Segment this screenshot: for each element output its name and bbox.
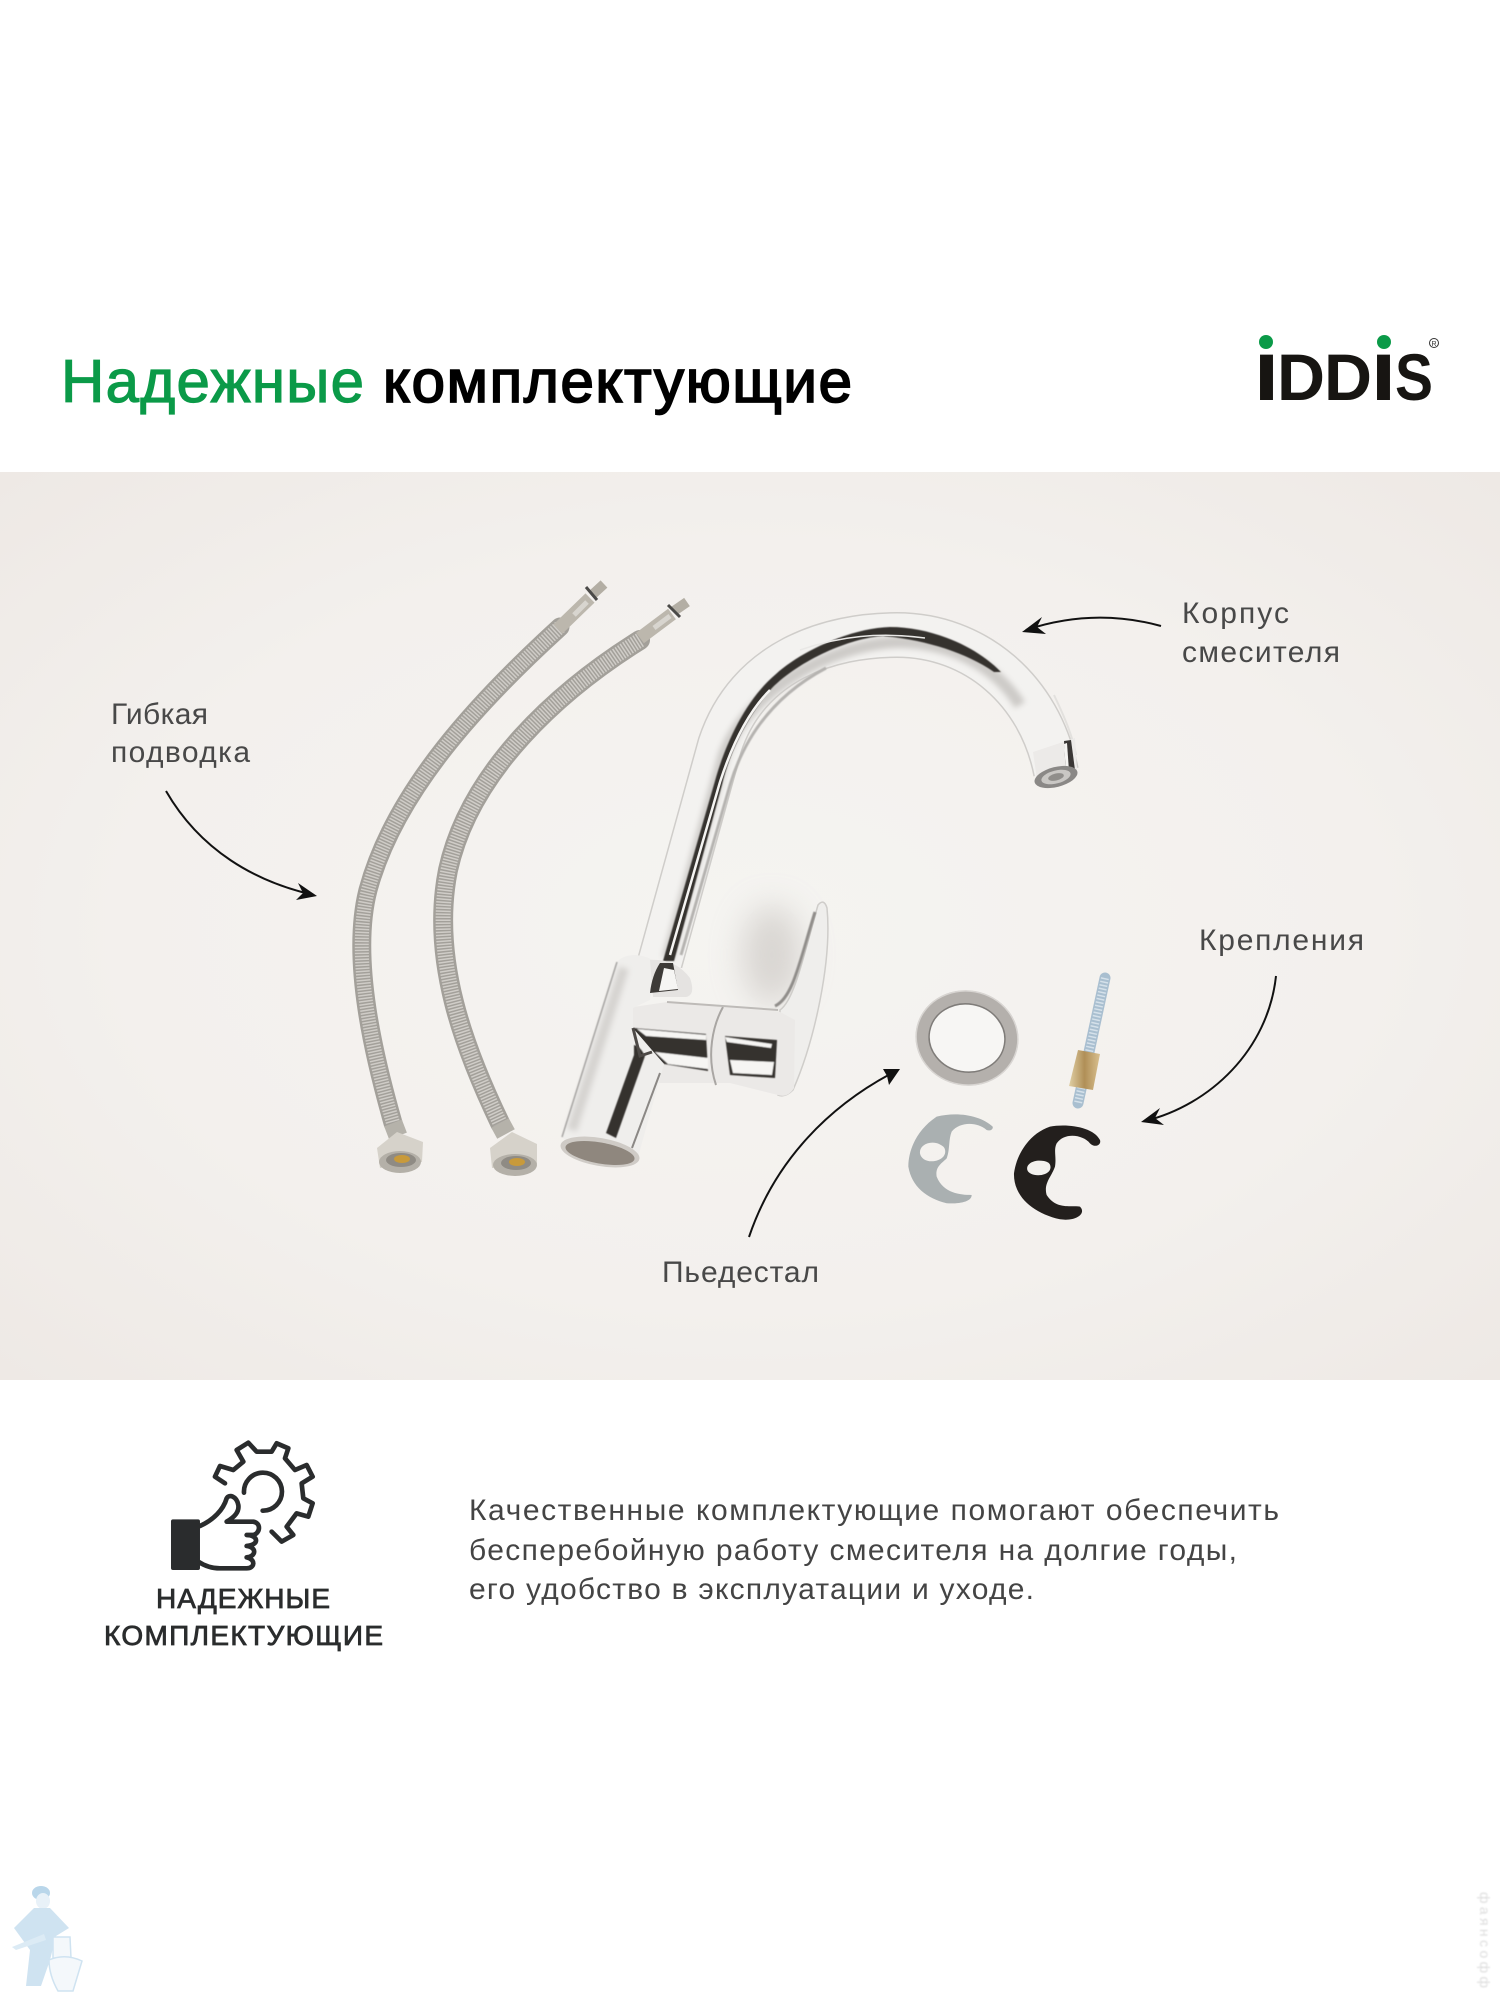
logo: IDDIS: R <box>1432 341 1437 348</box>
label: Крепления: Крепления <box>1199 924 1364 957</box>
label: Корпус смесителя: смесителя <box>1182 636 1340 669</box>
faucet nozzle and aerator <box>1032 738 1080 792</box>
faucet spout <box>660 627 1076 962</box>
description text <box>469 1494 1279 1606</box>
shadow under lever <box>742 905 802 1005</box>
arrow: to mounting parts <box>1141 976 1276 1125</box>
logo: IDDIS: D <box>1277 340 1325 414</box>
logo: IDDIS: I <box>1371 340 1396 414</box>
arrow: to hoses <box>166 791 317 900</box>
arrow: to pedestal <box>749 1069 900 1237</box>
flexible hose: left <box>362 584 604 1173</box>
gear outline <box>215 1443 313 1542</box>
label: Корпус смесителя <box>1182 597 1340 669</box>
label: Гибкая подводка: подводка <box>111 736 250 769</box>
thumb hand outline <box>198 1496 259 1568</box>
faucet body column <box>558 955 692 1173</box>
title: комплектующие <box>383 348 852 415</box>
arrow: to faucet body <box>1022 617 1161 634</box>
spout dark reflection <box>663 627 1001 961</box>
faucet lever body <box>633 1002 795 1096</box>
watermark: plumber with toilet <box>12 1886 82 1991</box>
mounting washer: black <box>1014 1125 1100 1220</box>
panel: product photo <box>0 472 1500 1380</box>
mounting washer: silver <box>908 1114 993 1203</box>
label: Гибкая подводка <box>111 698 250 769</box>
description text: Качественные комплектующие помогают обеспечить <box>469 1494 1279 1527</box>
pedestal ring <box>909 983 1025 1093</box>
gear centre arc <box>244 1473 282 1511</box>
flexible hose: right <box>443 602 687 1176</box>
icon caption: КОМПЛЕКТУЮЩИЕ <box>104 1620 383 1651</box>
logo: IDDIS: D <box>1324 340 1372 414</box>
logo: IDDIS <box>1254 335 1438 414</box>
mounting stud with brass nut <box>1069 978 1105 1103</box>
logo: IDDIS: I <box>1254 340 1279 414</box>
title: Надежные <box>61 348 364 415</box>
description text: бесперебойную работу смесителя на долгие годы, <box>469 1534 1237 1567</box>
spout soft shading <box>668 642 1020 958</box>
logo: IDDIS: S <box>1395 340 1433 414</box>
icon: thumbs up with gear <box>171 1443 313 1570</box>
icon caption: НАДЕЖНЫЕ <box>156 1583 330 1614</box>
description text: его удобство в эксплуатации и уходе. <box>469 1573 1034 1606</box>
label: Пьедестал: Пьедестал <box>662 1256 819 1289</box>
faucet lever blade <box>775 902 828 1096</box>
title <box>61 348 852 415</box>
faucet collar <box>650 960 692 997</box>
label: Гибкая подводка: Гибкая <box>111 698 208 731</box>
cuff block <box>171 1519 200 1570</box>
label: Корпус смесителя: Корпус <box>1182 597 1289 630</box>
icon caption <box>104 1583 383 1651</box>
watermark: vertical site name: фаянсофф <box>1477 1892 1493 1988</box>
